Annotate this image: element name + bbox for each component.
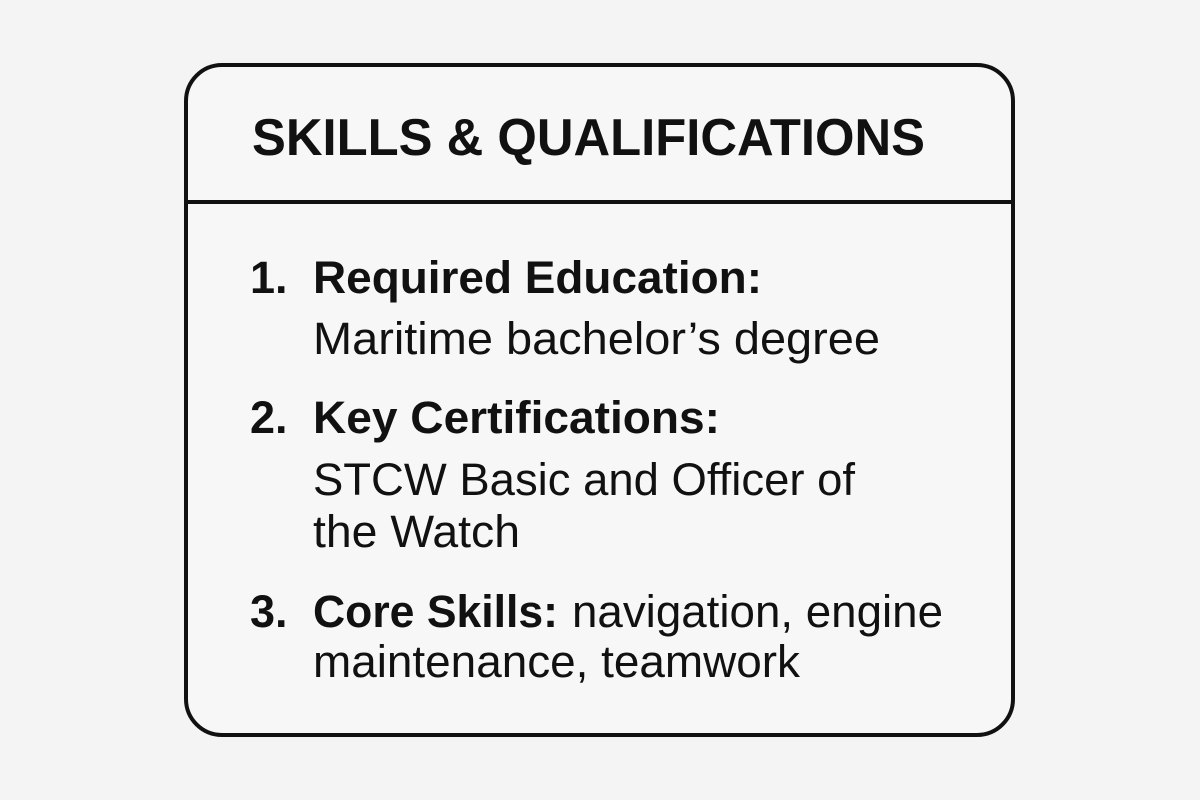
item 1: required education: Required Education: [313,252,762,303]
item 1: required education [250,252,880,364]
item 1: required education: 1. [250,252,288,303]
item 2: key certifications: 2. [250,392,288,443]
item 3: core skills: 3. [250,586,288,637]
item 3: core skills: maintenance, teamwork [313,636,801,687]
item 2: key certifications: STCW Basic and Officer of [313,454,855,505]
item 3: core skills: navigation, engine [572,586,943,637]
title: SKILLS & QUALIFICATIONS [252,109,925,167]
item 3: core skills [250,586,943,687]
panel: skills card [186,65,1013,735]
item 3: core skills: Core Skills: [313,586,558,637]
item 2: key certifications [250,392,855,557]
item 2: key certifications: Key Certifications: [313,392,720,443]
item 1: required education: Maritime bachelor’s degree [313,313,880,364]
item 2: key certifications: the Watch [313,506,520,557]
